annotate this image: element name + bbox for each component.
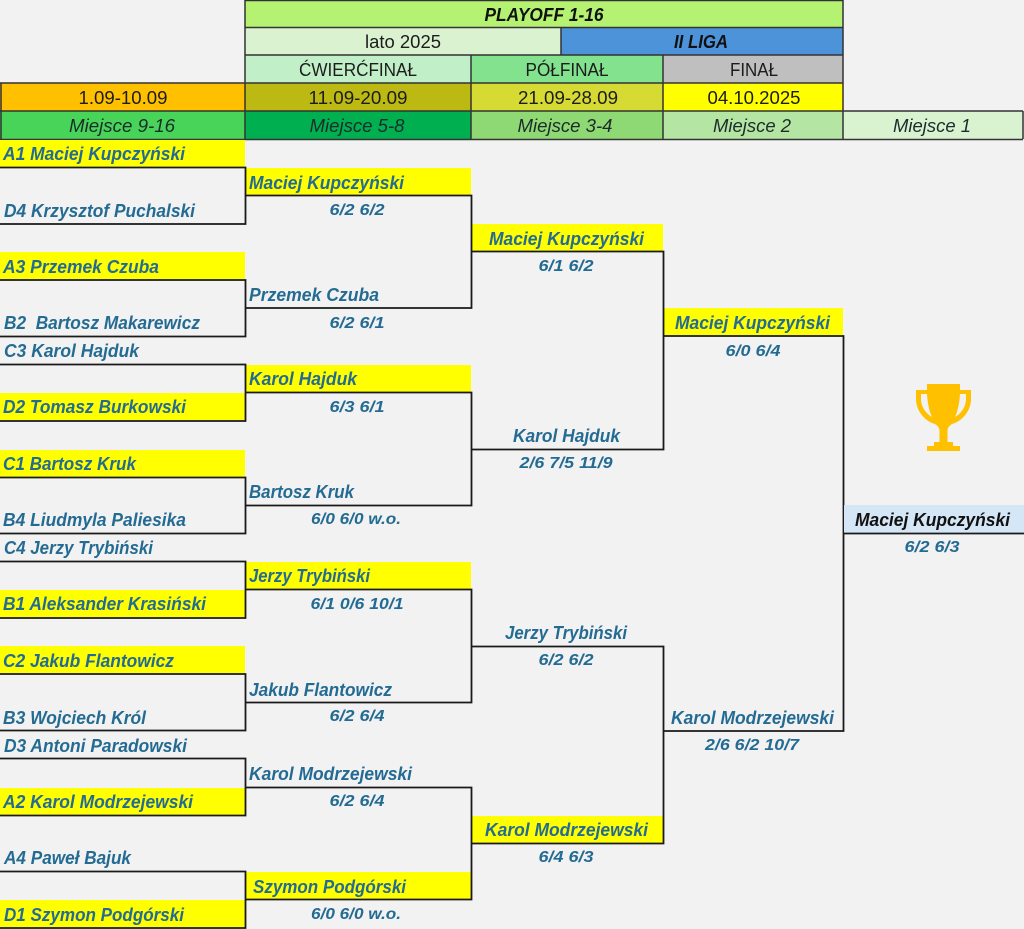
place: Miejsce 2: Miejsce 2: [713, 116, 791, 136]
player: B3 Wojciech Król: B3 Wojciech Król: [3, 707, 147, 728]
season: lato 2025: [245, 28, 561, 55]
place: Miejsce 1: Miejsce 1: [893, 116, 971, 136]
round: PÓŁFINAŁ: PÓŁFINAŁ: [526, 59, 608, 80]
round: quarterfinal results: [249, 172, 413, 923]
score: 6/1 0/6 10/1: 6/1 0/6 10/1: [310, 596, 404, 613]
score: 6/1 6/2: 6/1 6/2: [538, 258, 594, 275]
round: ĆWIERĆFINAŁ: [245, 55, 471, 83]
place: Miejsce 2: [663, 111, 843, 139]
place: Miejsce 9-16: [0, 111, 245, 139]
player: D4 Krzysztof Puchalski: D4 Krzysztof Puchalski: [4, 200, 196, 221]
winner: Jerzy Trybiński: Jerzy Trybiński: [505, 622, 628, 643]
player: D1 Szymon Podgórski: D1 Szymon Podgórski: [4, 904, 185, 925]
date: 1.09-10.09: 1.09-10.09: [78, 88, 168, 108]
score: 2/6 7/5 11/9: 2/6 7/5 11/9: [518, 455, 613, 472]
icon: trophy: [916, 384, 971, 451]
winner: Szymon Podgórski: Szymon Podgórski: [253, 876, 407, 897]
player: B1 Aleksander Krasiński: B1 Aleksander Krasiński: [3, 593, 207, 614]
player: A3 Przemek Czuba: A3 Przemek Czuba: [2, 256, 159, 277]
round: ĆWIERĆFINAŁ: ĆWIERĆFINAŁ: [299, 59, 417, 80]
champion: [844, 384, 1024, 556]
winner: Maciej Kupczyński: Maciej Kupczyński: [675, 312, 831, 333]
player: D3 Antoni Paradowski: D3 Antoni Paradowski: [4, 735, 188, 756]
winner: Maciej Kupczyński: Maciej Kupczyński: [249, 172, 405, 193]
winner: Karol Modrzejewski: Karol Modrzejewski: [249, 763, 413, 784]
date: 21.09-28.09: 21.09-28.09: [518, 88, 618, 108]
score: 6/4 6/3: 6/4 6/3: [538, 849, 594, 866]
date: 1.09-10.09: [0, 83, 245, 111]
winner: Jerzy Trybiński: Jerzy Trybiński: [249, 565, 371, 586]
place: Miejsce 3-4: [471, 111, 663, 139]
round: FINAŁ: [663, 55, 843, 83]
player: A4 Paweł Bajuk: A4 Paweł Bajuk: [3, 847, 133, 868]
round: semifinal results: [485, 228, 649, 866]
round: FINAŁ: FINAŁ: [730, 60, 778, 80]
score: 6/2 6/2: 6/2 6/2: [330, 202, 385, 219]
winner: Karol Hajduk: Karol Hajduk: [513, 425, 622, 446]
player: A1 Maciej Kupczyński: A1 Maciej Kupczyński: [2, 143, 186, 164]
place: Miejsce 9-16: Miejsce 9-16: [69, 116, 176, 136]
score: 6/2 6/4: 6/2 6/4: [330, 793, 385, 810]
yellow winner cells: [0, 140, 843, 927]
player: A2 Karol Modrzejewski: A2 Karol Modrzejewski: [2, 791, 194, 812]
score: 6/3 6/1: 6/3 6/1: [330, 399, 385, 416]
league: II LIGA: [561, 28, 843, 55]
season: lato 2025: lato 2025: [365, 32, 441, 52]
place: Miejsce 5-8: [245, 111, 471, 139]
winner: Karol Hajduk: Karol Hajduk: [249, 368, 359, 389]
score: 6/2 6/3: 6/2 6/3: [904, 539, 960, 556]
date: 11.09-20.09: 11.09-20.09: [308, 88, 408, 108]
winner: Przemek Czuba: Przemek Czuba: [249, 284, 379, 305]
winner: Karol Modrzejewski: Karol Modrzejewski: [671, 707, 835, 728]
score: 6/0 6/4: 6/0 6/4: [726, 343, 781, 360]
score: 6/2 6/2: 6/2 6/2: [538, 652, 594, 669]
date: 11.09-20.09: [245, 83, 471, 111]
winner: Karol Modrzejewski: Karol Modrzejewski: [485, 819, 649, 840]
player: C3 Karol Hajduk: C3 Karol Hajduk: [4, 340, 141, 361]
score: 6/0 6/0 w.o.: 6/0 6/0 w.o.: [311, 511, 401, 528]
round: PÓŁFINAŁ: [471, 55, 663, 83]
date: 04.10.2025: [663, 83, 843, 111]
date: 04.10.2025: 04.10.2025: [708, 88, 800, 108]
score: 2/6 6/2 10/7: 2/6 6/2 10/7: [704, 737, 800, 754]
score: 6/2 6/4: 6/2 6/4: [330, 708, 385, 725]
place: Miejsce 3-4: Miejsce 3-4: [518, 116, 612, 136]
title: PLAYOFF 1-16: PLAYOFF 1-16: [484, 5, 604, 25]
champion cell: Maciej Kupczyński: [844, 505, 1024, 532]
player: C1 Bartosz Kruk: C1 Bartosz Kruk: [3, 453, 138, 474]
place: Miejsce 5-8: Miejsce 5-8: [310, 116, 404, 136]
winner: Bartosz Kruk: Bartosz Kruk: [249, 481, 356, 502]
league: II LIGA: II LIGA: [674, 32, 728, 52]
player: B2 Bartosz Makarewicz: B2 Bartosz Makarewicz: [4, 312, 201, 333]
player: C4 Jerzy Trybiński: C4 Jerzy Trybiński: [4, 537, 154, 558]
player: B4 Liudmyla Paliesika: B4 Liudmyla Paliesika: [3, 509, 186, 530]
date: 21.09-28.09: [471, 83, 663, 111]
round: first round players: [2, 143, 207, 925]
title: PLAYOFF 1-16: [245, 0, 843, 28]
header table: [0, 0, 1023, 140]
round: final results: [671, 312, 835, 754]
winner: Maciej Kupczyński: Maciej Kupczyński: [489, 228, 645, 249]
place: Miejsce 1: [843, 111, 1023, 139]
score: 6/2 6/1: 6/2 6/1: [330, 315, 385, 332]
player: C2 Jakub Flantowicz: C2 Jakub Flantowicz: [3, 650, 175, 671]
winner: Jakub Flantowicz: Jakub Flantowicz: [249, 679, 393, 700]
score: 6/0 6/0 w.o.: 6/0 6/0 w.o.: [311, 906, 401, 923]
champion cell: Maciej Kupczyński: Maciej Kupczyński: [855, 509, 1011, 530]
player: D2 Tomasz Burkowski: D2 Tomasz Burkowski: [3, 396, 187, 417]
